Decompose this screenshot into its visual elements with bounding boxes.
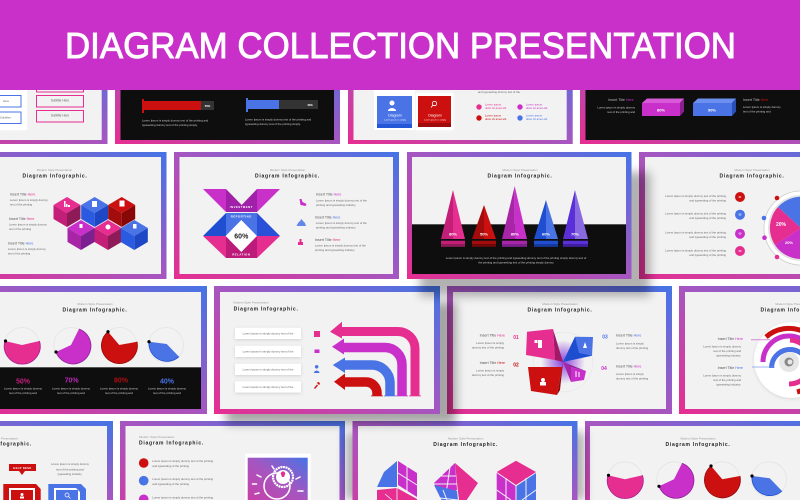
lightbulb picture bbox=[245, 454, 311, 500]
text cards: Lorem Ipsum is simply dummy text of the bbox=[243, 332, 294, 336]
list texts bbox=[665, 194, 726, 257]
text block 1 bbox=[703, 337, 743, 358]
slide: cube shapes bbox=[352, 421, 578, 500]
heading: Diagram Infographic. bbox=[719, 174, 785, 180]
heading: Diagram Infographic. bbox=[255, 174, 320, 180]
purple 3D bar bbox=[642, 98, 684, 116]
numbered markers: 03 bbox=[739, 233, 742, 236]
legend dots: dolor sit amet elit. bbox=[526, 117, 548, 121]
heading: Modern Style Presentation bbox=[542, 302, 578, 306]
text block 03: 03 bbox=[602, 334, 608, 340]
blue diagram card: Diagram bbox=[388, 114, 402, 118]
gauge values bbox=[16, 378, 175, 386]
heading: Modern Style Presentation bbox=[448, 436, 484, 440]
heading: Diagram Infographic. bbox=[139, 440, 204, 446]
list texts: and typesetting of the printing bbox=[689, 235, 726, 239]
arc diagram disc bbox=[754, 322, 800, 399]
blue progress bar: 40% bbox=[307, 103, 313, 107]
slide: 3D bars on black: text of the printing and bbox=[607, 110, 635, 114]
text block 2: Lorem Ipsum is simply dummy bbox=[9, 222, 47, 226]
slide: 3D bars on black: Insert Title Here bbox=[743, 98, 768, 102]
gauge: 50% bbox=[4, 328, 40, 364]
blue 3D bar bbox=[693, 98, 736, 116]
text block 1: Insert Title Here bbox=[316, 192, 341, 196]
slide: progress bars on black: typesetting dummy text of the printing simply. bbox=[245, 122, 301, 126]
blue search icon bbox=[48, 484, 86, 500]
text cards: Lorem Ipsum is simply dummy text of the bbox=[243, 385, 294, 389]
slide: 3D bars on black bbox=[580, 40, 800, 144]
gauge values: 40% bbox=[160, 378, 175, 386]
connector lines bbox=[751, 340, 775, 367]
cone: 60% blue: 60% bbox=[542, 232, 550, 236]
slide: gauge circles on black bbox=[0, 286, 207, 414]
legend dots bbox=[476, 102, 548, 121]
gauge values: 70% bbox=[65, 378, 79, 384]
gauge captions: Lorem Ipsum is simply dummy bbox=[100, 386, 138, 390]
text block 01: Insert Title Here bbox=[480, 334, 505, 338]
red diagram card: Diagram bbox=[428, 114, 442, 118]
caption bbox=[446, 256, 586, 264]
gauge values: 50% bbox=[16, 378, 31, 386]
text block 3: Insert Title Here bbox=[315, 238, 340, 242]
heading bbox=[760, 302, 800, 314]
text block 02: dummy text of the printing bbox=[472, 373, 504, 377]
text block 01: dummy text of the printing bbox=[472, 346, 504, 350]
text block 2: text of the printing and bbox=[713, 378, 741, 382]
shadow: cones slide bbox=[420, 172, 650, 296]
slide: progress bars on black bbox=[115, 40, 340, 144]
list texts: Lorem Ipsum is simply dummy text of the printing bbox=[665, 230, 726, 234]
slide: lightbulb bbox=[120, 421, 345, 500]
slide: subtitle boxes (top left): Subtitle Here bbox=[51, 98, 69, 102]
icon: red bbox=[314, 382, 320, 389]
cone: 50% red bbox=[472, 205, 496, 247]
red progress bar: 50% bbox=[205, 104, 211, 108]
slide: diagram cards bbox=[348, 40, 573, 144]
text block 1: Lorem Ipsum is simply dummy text of the bbox=[316, 198, 367, 202]
numbered markers: 02 bbox=[739, 214, 742, 217]
text block 1 bbox=[316, 192, 367, 207]
pie chart bbox=[762, 191, 800, 265]
gauge values: 80% bbox=[114, 378, 129, 384]
text block 3: text of the printing bbox=[8, 252, 31, 256]
blue 3D bar: 90% bbox=[708, 108, 716, 112]
blue diagram card: Lorem ipsum is simply bbox=[384, 118, 407, 122]
text block 2: Insert Title Here bbox=[718, 366, 743, 370]
gauge captions: text of the printing and bbox=[105, 391, 133, 395]
gauge set bbox=[607, 462, 786, 498]
pie chart: 20% bbox=[785, 240, 793, 245]
list texts: and typesetting of the printing bbox=[689, 253, 726, 257]
slide: 3D bars on black: Lorem ipsum is simply dummy bbox=[743, 105, 781, 109]
heading bbox=[255, 168, 320, 180]
cone: 80% pink bbox=[441, 190, 465, 247]
slide: help desk (bottom left): text of the printing and bbox=[56, 467, 84, 471]
text block 2: typesetting industry. bbox=[716, 382, 741, 386]
heading bbox=[719, 168, 785, 180]
legend dots: Lorem ipsum bbox=[485, 102, 502, 106]
list texts: Lorem Ipsum is simply dummy text of the printing bbox=[665, 248, 726, 252]
list texts: Lorem Ipsum is simply dummy text of the printing bbox=[665, 194, 726, 198]
slide: pie chart bbox=[639, 152, 800, 279]
radar backdrop bbox=[533, 332, 593, 392]
heading bbox=[0, 436, 32, 448]
slide: isometric cubes bbox=[0, 152, 166, 279]
gauge captions: text of the printing and bbox=[57, 391, 85, 395]
slide: cones on black bbox=[407, 152, 632, 279]
block: blue 03 bbox=[563, 337, 593, 362]
numbered list: Lorem Ipsum is simply dummy text of the printing bbox=[152, 459, 214, 463]
numbered markers bbox=[735, 192, 745, 256]
icon: pink bbox=[298, 239, 303, 245]
slide: 3D bars on black: text of the printing and bbox=[743, 110, 771, 114]
slide: help desk (bottom left) bbox=[0, 421, 113, 500]
gauge captions: text of the printing and bbox=[9, 391, 37, 395]
slide: gauges repeat (bottom right) bbox=[585, 421, 800, 500]
slide: progress bars on black: typesetting dummy text of the printing simply. bbox=[142, 123, 198, 127]
list texts: and typesetting of the printing bbox=[689, 216, 726, 220]
text block 04: dummy text of the printing bbox=[616, 376, 649, 380]
red desk icon bbox=[3, 484, 41, 500]
text block 01: 01 bbox=[513, 335, 519, 341]
slide: concentric arcs bbox=[679, 286, 800, 414]
slide: progress bars on black: Lorem Ipsum is simply dummy text of the printing and bbox=[142, 118, 209, 122]
text block 03: dummy text of the printing bbox=[616, 346, 649, 350]
heading bbox=[62, 302, 128, 314]
cube: purple grid bbox=[434, 463, 478, 500]
text block 01: Lorem Ipsum is simply bbox=[476, 341, 505, 345]
icon: pink bbox=[314, 331, 320, 337]
text block 3 bbox=[8, 242, 46, 256]
cone: 80% purple bbox=[502, 186, 527, 247]
cone: 70% violet: 70% bbox=[571, 232, 579, 236]
slide: help desk (bottom left): Lorem Ipsum is simply dummy bbox=[51, 462, 89, 466]
X diagram bbox=[203, 189, 280, 258]
gauge captions: Lorem Ipsum is simply dummy bbox=[4, 386, 42, 390]
text cards bbox=[235, 328, 301, 394]
text block 2 bbox=[703, 366, 743, 386]
heading: Diagram Infographic. bbox=[62, 308, 128, 314]
heading bbox=[233, 300, 299, 312]
text block 04: Lorem Ipsum is simply bbox=[616, 372, 644, 376]
legend dots: dolor sit amet elit. bbox=[526, 106, 548, 110]
text block 1: text of the printing and bbox=[713, 349, 741, 353]
heading: Diagram Infographic. bbox=[22, 174, 88, 180]
gauge captions: text of the printing and bbox=[153, 391, 181, 395]
text block 2: printing and typesetting industry. bbox=[316, 226, 356, 230]
legend dots: Lorem ipsum bbox=[526, 102, 543, 106]
text block 03 bbox=[602, 334, 649, 350]
list texts: Lorem Ipsum is simply dummy text of the printing bbox=[665, 212, 726, 216]
legend dots: dolor sit amet elit. bbox=[485, 117, 507, 121]
slide: subtitle boxes (top left): Here bbox=[3, 99, 10, 103]
text block 01 bbox=[472, 334, 519, 350]
numbered list: Lorem Ipsum is simply dummy text of the printing bbox=[152, 477, 214, 481]
heading bbox=[22, 168, 88, 180]
heading: Modern Style Presentation bbox=[734, 168, 770, 172]
heading bbox=[665, 436, 731, 448]
text cards: Lorem Ipsum is simply dummy text of the bbox=[243, 368, 294, 372]
text block 1: typesetting industry. bbox=[716, 354, 741, 358]
shadow: cube slide bbox=[345, 432, 585, 500]
text block 2 bbox=[9, 217, 47, 231]
heading: Diagram Infographic. bbox=[527, 308, 593, 314]
icon: purple bbox=[300, 199, 306, 206]
text block 03: Insert Title Here bbox=[616, 334, 641, 338]
gauge: 40% bbox=[147, 328, 184, 362]
caption: the printing and typesetting text of the printing simply dummy bbox=[478, 260, 554, 264]
heading: Modern Style Presentation bbox=[270, 168, 306, 172]
block: pink 01 bbox=[526, 329, 563, 362]
slide: progress bars on black: Lorem Ipsum is simply dummy text of the printing and bbox=[245, 118, 312, 122]
text block 2: Insert Title Here bbox=[9, 217, 34, 221]
heading: Modern Style Presentation bbox=[502, 168, 538, 172]
text block 2: Insert Title Here bbox=[315, 216, 340, 220]
list texts: and typesetting of the printing bbox=[689, 198, 726, 202]
icon: purple bbox=[314, 350, 320, 353]
heading: Modern Style Presentation bbox=[77, 302, 113, 306]
text cards: Lorem Ipsum is simply dummy text of the bbox=[243, 350, 294, 354]
slide: 3D bars on black: Insert Title Here bbox=[608, 98, 634, 102]
text block 3: Lorem Ipsum is simply dummy text of the bbox=[315, 244, 366, 248]
heading: Modern Style Presentation bbox=[37, 168, 73, 172]
text block 1: Insert Title Here bbox=[10, 192, 35, 196]
arrow: blue bbox=[333, 358, 396, 396]
text block 3 bbox=[315, 238, 366, 252]
gauge: 80% bbox=[101, 328, 137, 364]
text block 03: Lorem Ipsum is simply bbox=[616, 342, 644, 346]
red progress bar bbox=[142, 99, 214, 113]
title: DIAGRAM COLLECTION PRESENTATION bbox=[65, 25, 736, 66]
text block 3: printing and typesetting industry. bbox=[315, 248, 355, 252]
heading bbox=[527, 302, 593, 314]
blue subtitle boxes bbox=[0, 96, 21, 124]
text block 3: Lorem Ipsum is simply dummy bbox=[8, 247, 46, 251]
text block 2: text of the printing bbox=[9, 227, 32, 231]
X diagram: INVESTMENT bbox=[230, 205, 253, 209]
text block 1: Insert Title Here bbox=[718, 337, 743, 341]
text block 04 bbox=[601, 364, 649, 380]
gauge captions: Lorem Ipsum is simply dummy bbox=[148, 386, 186, 390]
text block 02: Lorem Ipsum is simply bbox=[476, 368, 505, 372]
slide: subtitle boxes (top left): Subtitle Here bbox=[51, 114, 69, 118]
X diagram: 60% bbox=[234, 234, 249, 241]
text block 2: Lorem Ipsum is simply dummy text of the bbox=[316, 221, 367, 225]
gauge captions: Lorem Ipsum is simply dummy bbox=[52, 386, 90, 390]
slide: diagram cards: and typesetting dummy text of the bbox=[478, 90, 520, 94]
block: purple 04 bbox=[563, 362, 586, 382]
heading: Modern Style Presentation bbox=[233, 300, 269, 304]
text block 02 bbox=[472, 361, 519, 377]
text block 3: Insert Title Here bbox=[8, 242, 33, 246]
numbered markers: 04 bbox=[739, 250, 742, 253]
legend dots: dolor sit amet elit. bbox=[485, 106, 507, 110]
icon: blue bbox=[314, 365, 319, 373]
help desk tag: HELP DESK bbox=[13, 466, 32, 470]
numbered list: and typesetting of the printing bbox=[152, 482, 189, 486]
gauge: 70% bbox=[54, 328, 91, 364]
icon: blue bbox=[296, 219, 306, 226]
arrow: pink bbox=[330, 322, 421, 396]
red diagram card bbox=[416, 93, 453, 130]
numbered markers: 01 bbox=[739, 196, 742, 199]
X diagram: REPORTING bbox=[231, 214, 252, 218]
cone: 80% pink: 80% bbox=[449, 232, 457, 236]
arrow: purple bbox=[332, 338, 408, 396]
gauge captions bbox=[4, 386, 186, 395]
text block 02: Insert Title Here bbox=[480, 361, 505, 365]
heading: Diagram Infographic. bbox=[433, 442, 498, 448]
heading bbox=[487, 168, 553, 180]
pie chart: 20% bbox=[776, 222, 787, 228]
slide: 60% X diagram bbox=[174, 152, 399, 279]
slide: 3D bars on black: Lorem ipsum is simply dummy bbox=[597, 106, 636, 110]
blue diagram card bbox=[374, 86, 415, 130]
heading: Diagram Infographic. bbox=[665, 442, 731, 448]
red diagram card: Lorem ipsum is simply bbox=[424, 118, 447, 122]
heading: Modern Style Presentation bbox=[139, 435, 175, 439]
cube: pink top bbox=[497, 461, 536, 500]
numbered list: Lorem Ipsum is simply dummy text of the printing bbox=[152, 496, 214, 500]
numbered list: and typesetting of the printing bbox=[152, 464, 189, 468]
text block 1: text of the printing bbox=[10, 202, 33, 206]
slide: 3D numbered blocks bbox=[447, 286, 672, 414]
purple 3D bar: 80% bbox=[657, 108, 665, 112]
blue progress bar bbox=[246, 98, 318, 112]
text block 1: Lorem Ipsum is simply dummy bbox=[10, 198, 48, 202]
arrow: red bbox=[334, 374, 383, 396]
text block 02: 02 bbox=[513, 363, 519, 369]
cube stack bbox=[54, 197, 148, 250]
heading: Diagram Infographic. bbox=[234, 306, 299, 312]
shadow: arrows slide bbox=[226, 302, 456, 424]
heading: Modern Style Presentation bbox=[680, 436, 716, 440]
cube: blue left face bbox=[377, 461, 417, 500]
slide: help desk (bottom left): typesetting industry. bbox=[58, 472, 83, 476]
block: red 02 bbox=[528, 362, 563, 395]
heading bbox=[433, 436, 498, 448]
heading bbox=[139, 435, 204, 446]
legend dots: Lorem ipsum bbox=[526, 114, 543, 118]
heading: Diagram Infographic. bbox=[487, 174, 553, 180]
help desk tag bbox=[9, 464, 36, 475]
slide: curved arrows bbox=[214, 286, 440, 414]
text block 1: Lorem Ipsum is simply dummy bbox=[703, 344, 742, 348]
text block 04: 04 bbox=[601, 366, 607, 372]
cone: 80% purple: 80% bbox=[511, 232, 519, 236]
text block 04: Insert Title Here bbox=[616, 364, 641, 368]
text block 1 bbox=[10, 192, 48, 206]
X diagram: RELATION bbox=[232, 252, 250, 256]
pink subtitle boxes bbox=[36, 80, 84, 122]
text block 2: Lorem Ipsum is simply dummy bbox=[703, 374, 742, 378]
caption: Lorem Ipsum is simply dummy text of the printing and typesetting dummy text of the printing simply dummy text of bbox=[446, 256, 586, 260]
text block 2 bbox=[315, 216, 367, 230]
slide: subtitle boxes (top left) bbox=[0, 40, 108, 144]
cone: 70% violet bbox=[563, 190, 588, 247]
header banner bbox=[0, 0, 800, 90]
slide: subtitle boxes (top left): Subtitles bbox=[0, 116, 11, 120]
legend dots: Lorem ipsum bbox=[485, 114, 502, 118]
text block 1: printing and typesetting industry. bbox=[316, 203, 356, 207]
numbered list bbox=[139, 458, 214, 500]
cone: 60% blue bbox=[534, 200, 558, 247]
cone: 50% red: 50% bbox=[480, 232, 488, 236]
